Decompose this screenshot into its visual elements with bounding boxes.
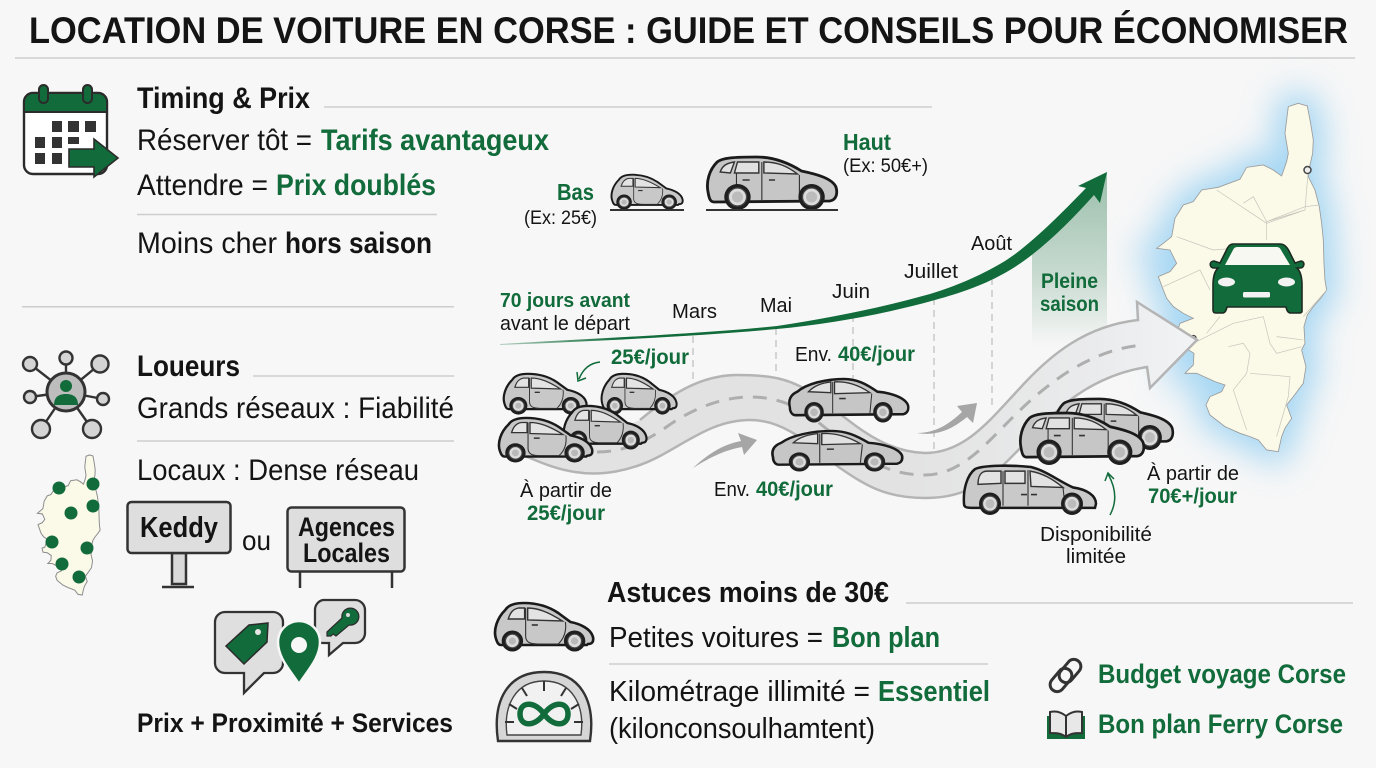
label: env 40 bas: Env.	[714, 479, 750, 501]
arrow: flèche grise 2	[917, 403, 977, 434]
text: attendre: Attendre =	[137, 169, 268, 202]
link: budget voyage: Budget voyage Corse	[1098, 659, 1346, 689]
label: à partir de 70: À partir de	[1147, 462, 1239, 485]
area: pleine saison: Pleine	[1041, 270, 1098, 293]
area: pleine saison: saison	[1040, 293, 1099, 316]
text: ou: ou	[242, 525, 271, 556]
map: Corse	[1157, 103, 1327, 452]
icon: network	[23, 352, 109, 438]
icon: bulles prix, position, clé	[215, 600, 365, 693]
panel: astuces moins de 30 euros	[495, 577, 1353, 745]
cars: SUV et monospace 70 euros	[964, 399, 1173, 515]
text: grands réseaux: Grands réseaux : Fiabilité	[137, 392, 454, 425]
sign: agences locales: Locales	[303, 538, 390, 568]
heading: timing: Timing & Prix	[137, 82, 310, 115]
label: bas	[524, 179, 597, 229]
label: disponibilité limitée: Disponibilité	[1040, 524, 1152, 546]
label: 25 euros: 25€/jour	[611, 346, 689, 369]
text: locaux: Locaux : Dense réseau	[137, 454, 419, 487]
label: bas: Bas	[557, 179, 594, 205]
text: petites voitures: Petites voitures =	[609, 622, 823, 654]
text: prix proximité services: Prix + Proximité + Services	[137, 708, 453, 738]
road arrow	[525, 302, 1197, 498]
label: haut: Haut	[843, 129, 891, 155]
text: petites voitures: Bon plan	[832, 622, 940, 654]
labels: mois: Mars	[672, 301, 717, 323]
label: disponibilité limitée: limitée	[1066, 546, 1126, 568]
panel: loueurs	[23, 350, 454, 738]
label: 25 euros	[577, 346, 689, 381]
text: note kilométrage: (kilonconsoulhamtent)	[609, 713, 875, 745]
labels: mois: Août	[971, 233, 1012, 255]
text: réserver tôt: Tarifs avantageux	[321, 124, 549, 157]
sign: agences locales: Agences	[298, 512, 395, 542]
text: petites voitures	[609, 622, 940, 654]
sign: agences locales	[288, 508, 404, 588]
link: bon plan ferry: Bon plan Ferry Corse	[1098, 709, 1343, 739]
cars: à partir de 25 euros	[499, 374, 677, 463]
text: kilométrage illimité: Essentiel	[878, 676, 990, 708]
icon: lien	[1047, 657, 1084, 694]
label: env 40 haut: 40€/jour	[838, 343, 915, 366]
label: env 40 haut: Env.	[795, 344, 832, 366]
text: attendre: Prix doublés	[276, 169, 436, 202]
icon: grand SUV	[706, 157, 838, 210]
heading: loueurs: Loueurs	[137, 350, 240, 383]
label: env 40 bas: 40€/jour	[756, 478, 833, 501]
label: env 40 haut	[795, 343, 915, 366]
chart: fourchette Bas Haut	[524, 129, 928, 229]
label: à partir de 70	[1147, 462, 1239, 508]
label: à partir de 70: 70€+/jour	[1148, 485, 1237, 508]
arrow: flèche grise 1	[693, 433, 757, 468]
panel: timing et prix	[24, 82, 932, 260]
arrow: courbe verte	[500, 172, 1107, 345]
labels: mois: Juillet	[904, 261, 958, 283]
icon: calendar	[24, 85, 118, 177]
icon: petite voiture	[495, 603, 593, 652]
label: 70 jours: 70 jours avant	[500, 290, 630, 312]
text: hors saison: Moins cher	[137, 227, 277, 260]
icon: petite voiture	[610, 175, 684, 210]
label: à partir de 25: 25€/jour	[527, 502, 605, 525]
cars: berlines 40 euros	[772, 379, 908, 472]
icon: petite carte de la Corse	[37, 455, 100, 595]
label: 70 jours: avant le départ	[500, 313, 630, 335]
text: attendre	[137, 169, 436, 202]
text: hors saison	[137, 227, 432, 260]
labels: mois: Mai	[760, 295, 792, 317]
label: à partir de 25	[520, 479, 612, 525]
label: 70 jours	[500, 290, 630, 335]
label: disponibilité limitée	[1040, 473, 1152, 568]
label: haut	[843, 129, 928, 177]
labels: mois: Juin	[832, 281, 870, 303]
label: env 40 bas	[714, 478, 833, 501]
text: réserver tôt	[137, 124, 549, 157]
labels: mois	[672, 233, 1012, 323]
area: pleine saison	[1032, 172, 1107, 347]
text: hors saison: hors saison	[285, 227, 432, 260]
label: haut: (Ex: 50€+)	[843, 156, 928, 177]
icon: voiture verte sur la carte	[1210, 244, 1304, 313]
text: kilométrage illimité: Kilométrage illimité =	[609, 676, 870, 708]
sign: Keddy: Keddy	[140, 512, 218, 544]
icon: livre	[1048, 711, 1084, 738]
text: réserver tôt: Réserver tôt =	[137, 124, 312, 157]
chart: courbe des prix	[500, 172, 1107, 465]
icon: compteur kilométrage illimité	[497, 672, 591, 741]
label: à partir de 25: À partir de	[520, 479, 612, 502]
label: bas: (Ex: 25€)	[524, 208, 597, 229]
sign: Keddy	[128, 502, 230, 587]
heading: astuces: Astuces moins de 30€	[607, 577, 889, 609]
